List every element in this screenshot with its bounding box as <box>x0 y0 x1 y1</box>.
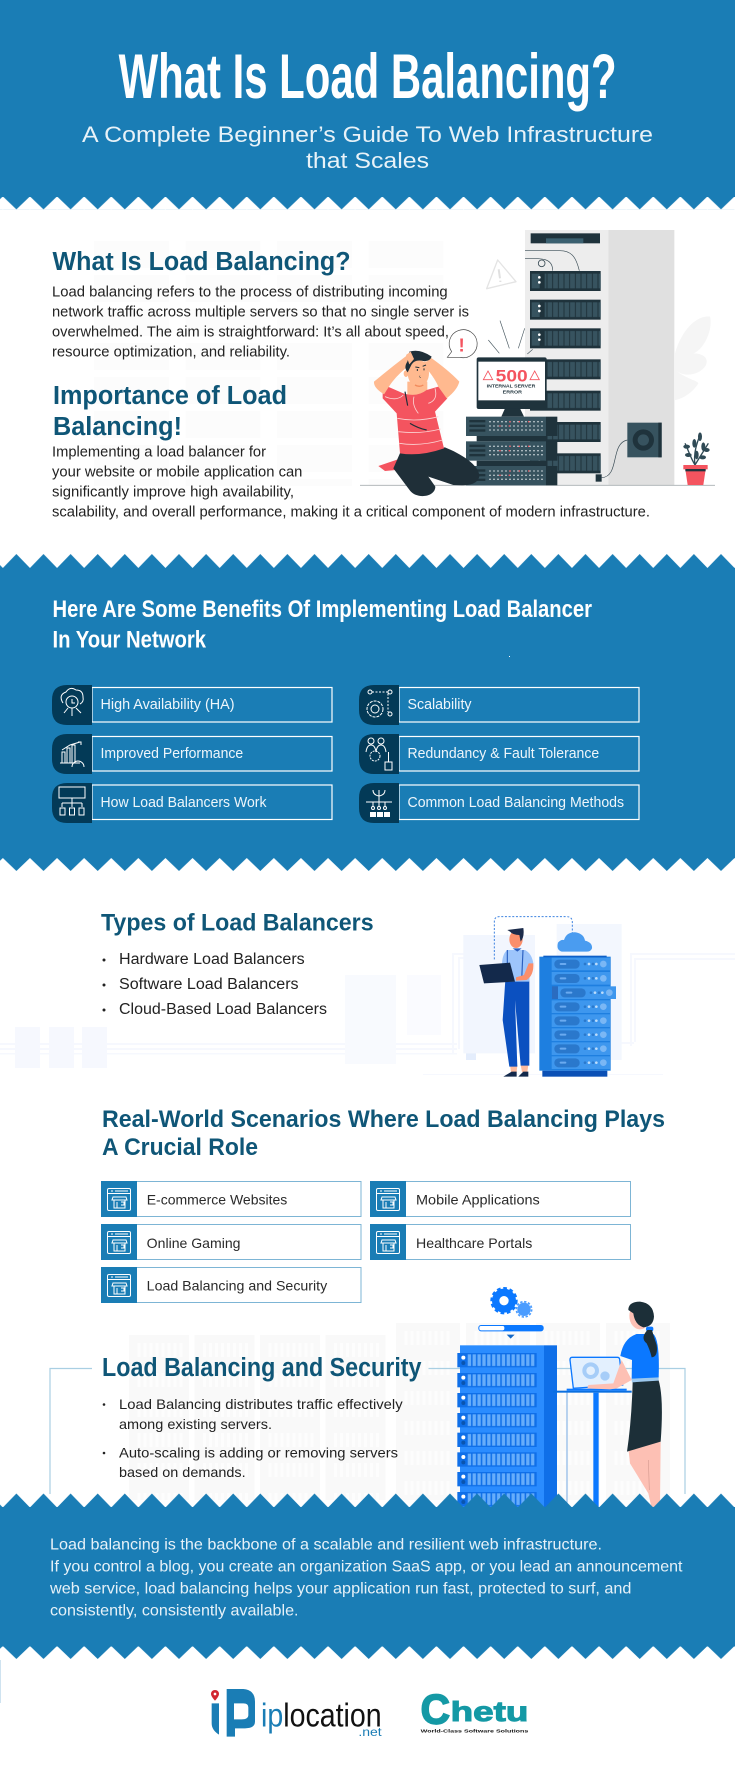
speech bubble: ! <box>459 335 465 356</box>
panel: conclusion <box>0 1494 735 1659</box>
faint leaf <box>675 317 711 400</box>
subtitle <box>82 122 653 173</box>
progress bar <box>478 1325 544 1339</box>
scenario: load balancing and security: Load Balancing and Security <box>147 1278 327 1294</box>
scenario: healthcare portals <box>370 1224 630 1260</box>
logo mark <box>211 1689 255 1737</box>
panel: header band <box>0 0 735 209</box>
benefit: redundancy and fault tolerance: Redundancy & Fault Tolerance <box>408 746 599 762</box>
text block: load balancing and security <box>102 1354 422 1480</box>
scenario: online gaming: Online Gaming <box>147 1235 240 1251</box>
heading <box>53 382 287 441</box>
benefit: improved performance <box>52 734 332 774</box>
logo: chetu <box>421 1685 529 1734</box>
scenario: mobile applications: Mobile Applications <box>416 1192 540 1208</box>
speech bubble <box>447 330 477 358</box>
heading: real-world scenarios: Real-World Scenarios Where Load Balancing Plays <box>102 1106 665 1133</box>
illustration: man with laptop and server rack <box>463 917 622 1077</box>
logo: chetu: hetu <box>451 1696 528 1727</box>
benefit: high availability: High Availability (HA) <box>100 697 234 713</box>
scenario: e-commerce websites <box>101 1181 361 1217</box>
benefit: redundancy and fault tolerance <box>359 734 639 774</box>
server tower <box>525 230 674 485</box>
faint server rack background: security section <box>129 1323 673 1500</box>
logo: iplocation.net: .net <box>358 1725 382 1739</box>
paragraph: Implementing a load balancer for <box>52 444 266 460</box>
server tower <box>457 1345 557 1509</box>
logo: chetu: World-Class Software Solutions <box>421 1728 529 1734</box>
paragraph: overwhelmed. The aim is straightforward: It’s all about speed, <box>52 324 449 340</box>
paragraph: network traffic across multiple servers so that no single server is <box>52 304 469 320</box>
paragraph: consistently, consistently available. <box>50 1602 298 1619</box>
heading <box>52 596 592 654</box>
paragraph: your website or mobile application can <box>52 464 302 480</box>
frame lines: security section <box>50 1368 685 1494</box>
logo: chetu: C <box>421 1685 450 1732</box>
panel: benefits <box>0 554 735 871</box>
heading: In Your Network <box>52 626 207 654</box>
paragraph: web service, load balancing helps your application run fast, protected to surf, and <box>49 1580 631 1598</box>
subtitle: A Complete Beginner’s Guide To Web Infrastructure <box>82 122 653 147</box>
benefit: common load balancing methods: Common Load Balancing Methods <box>408 795 624 811</box>
warning triangle <box>487 260 516 289</box>
illustration: stressed man with 500 server error <box>360 230 715 496</box>
alert lines <box>488 321 533 354</box>
benefit: high availability <box>52 685 332 725</box>
monitor: 500 <box>496 366 528 385</box>
server rack <box>539 956 616 1077</box>
paragraph <box>49 1536 683 1619</box>
paragraph: resource optimization, and reliability. <box>52 344 290 360</box>
woman <box>587 1302 662 1508</box>
benefit: scalability <box>359 685 639 725</box>
paragraph: Load balancing refers to the process of distributing incoming <box>52 284 448 300</box>
benefit: scalability: Scalability <box>408 697 472 713</box>
heading: Balancing! <box>53 413 182 441</box>
benefit: how load balancers work: How Load Balancers Work <box>100 795 267 811</box>
logo: iplocation.net <box>211 1689 382 1739</box>
list <box>102 951 327 1018</box>
monitor <box>477 357 547 417</box>
benefit: how load balancers work <box>52 783 332 823</box>
text block: what is load balancing <box>52 248 469 360</box>
man <box>479 928 533 1077</box>
floor <box>360 484 715 487</box>
gears <box>492 1288 532 1317</box>
wordmark: iplocation <box>261 1698 382 1735</box>
heading: Importance of Load <box>53 382 287 410</box>
illustration: woman at desk with server <box>457 1288 662 1509</box>
list: Hardware Load Balancers <box>119 951 305 968</box>
monitor: INTERNAL SERVER <box>487 384 536 389</box>
paragraph <box>52 444 650 520</box>
dashed connection <box>494 917 572 959</box>
laptop <box>567 1357 627 1391</box>
subtitle: that Scales <box>306 148 429 173</box>
desk <box>553 1391 632 1508</box>
server stack <box>466 417 557 485</box>
scenario: mobile applications <box>370 1181 630 1217</box>
heading: Load Balancing and Security <box>102 1354 422 1382</box>
faint network background: types section <box>0 953 735 1075</box>
heading: What Is Load Balancing? <box>52 248 350 276</box>
list: Auto-scaling is adding or removing servers <box>119 1445 398 1461</box>
heading: real-world scenarios <box>102 1106 665 1161</box>
benefit: improved performance: Improved Performance <box>100 746 243 762</box>
scenario: online gaming <box>101 1224 361 1260</box>
list: Load Balancing distributes traffic effectively <box>119 1396 403 1412</box>
scenario: healthcare portals: Healthcare Portals <box>416 1235 532 1251</box>
list: based on demands. <box>119 1464 246 1480</box>
text block: types of load balancers <box>101 910 374 1018</box>
heading: real-world scenarios: A Crucial Role <box>102 1134 258 1161</box>
speaker and cable <box>596 423 662 482</box>
monitor: ERROR <box>503 390 523 395</box>
faint server rack background <box>94 241 444 486</box>
scenario: e-commerce websites: E-commerce Websites <box>147 1192 287 1208</box>
list: Cloud-Based Load Balancers <box>119 1001 327 1018</box>
paragraph: scalability, and overall performance, making it a critical component of modern infrastructure. <box>52 504 650 520</box>
benefit: common load balancing methods <box>359 783 639 823</box>
list: Software Load Balancers <box>119 976 299 993</box>
cloud <box>557 932 592 952</box>
paragraph <box>52 284 469 360</box>
heading: Here Are Some Benefits Of Implementing Load Balancer <box>52 596 592 623</box>
paragraph: Load balancing is the backbone of a scalable and resilient web infrastructure. <box>50 1536 602 1554</box>
plant <box>683 432 710 485</box>
paragraph: If you control a blog, you create an organization SaaS app, or you lead an announcement <box>50 1558 683 1576</box>
text block: importance of load balancing <box>52 382 650 520</box>
scenario: load balancing and security <box>101 1267 361 1303</box>
heading: Types of Load Balancers <box>101 910 374 936</box>
paragraph: significantly improve high availability, <box>52 484 294 500</box>
list: among existing servers. <box>119 1416 272 1432</box>
list <box>103 1396 403 1480</box>
man <box>374 351 479 496</box>
